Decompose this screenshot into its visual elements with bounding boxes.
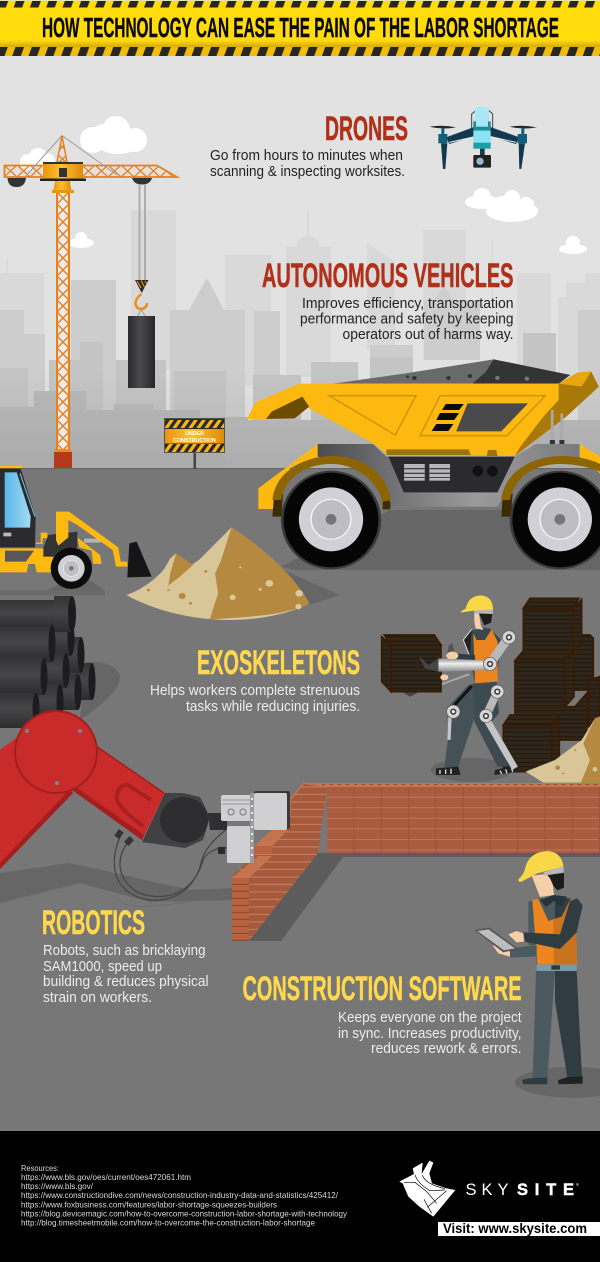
text: robotics: SAM1000, speed up (43, 958, 162, 975)
drone (429, 107, 537, 169)
text: robotics: strain on workers. (43, 989, 152, 1006)
text: autonomous vehicles: performance and safety by keeping (300, 310, 514, 328)
robot lower limb (0, 720, 73, 869)
sand pile (126, 527, 340, 620)
logo: skysite: SITE (517, 1181, 574, 1199)
worker legs (522, 971, 583, 1084)
text: exoskeletons (150, 644, 360, 715)
truck bed (247, 372, 599, 456)
logo: skysite: ® (576, 1182, 579, 1187)
resources list: https://www.foxbusiness.com/features/labor-shortage-squeezes-builders (21, 1199, 277, 1209)
sign: under construction: UNDER (185, 431, 204, 437)
worker belt (537, 964, 577, 971)
text: robotics: Robots, such as bricklaying (43, 942, 206, 959)
crane (4, 136, 177, 468)
text: autonomous vehicles: Improves efficiency, transportation (302, 295, 514, 312)
hook (135, 280, 148, 316)
resources list: https://www.bls.gov/ (21, 1181, 94, 1191)
footer panel (0, 1131, 600, 1262)
resources list (21, 1163, 348, 1228)
crate carried (382, 635, 441, 697)
text: robotics: building & reduces physical (43, 973, 208, 990)
hanging block (128, 316, 155, 388)
tablet and hands (474, 928, 524, 957)
worker torso (440, 627, 501, 685)
text: construction software (242, 970, 522, 1057)
crane jib (4, 136, 177, 177)
robot cables (114, 828, 230, 906)
truck shadow (281, 510, 600, 570)
logo: skysite: SKY (466, 1181, 508, 1199)
robot shadow (0, 863, 232, 903)
text: construction software: in sync. Increases productivity, (338, 1025, 522, 1042)
logo mark (399, 1161, 455, 1217)
worker shadow (515, 1067, 600, 1098)
wall shadow (249, 853, 600, 941)
text: construction software: reduces rework & errors. (371, 1040, 522, 1057)
robot arm (0, 710, 290, 906)
brick wall (232, 783, 600, 941)
truck rear wheel (501, 444, 600, 569)
robot shoulder (14, 710, 98, 794)
worker legs (436, 683, 518, 775)
visit link box: Visit: www.skysite.com (443, 1221, 587, 1236)
text: exoskeletons: tasks while reducing injuries. (186, 698, 360, 715)
text: construction software: Keeps everyone on the project (338, 1009, 522, 1026)
text: autonomous vehicles (262, 257, 514, 343)
exoskeleton frame (418, 631, 516, 768)
sign: under construction: CONSTRUCTION (173, 438, 216, 444)
resources list: Resources: (21, 1163, 59, 1173)
hoist cables (140, 184, 145, 280)
text: drones: scanning & inspecting worksites. (210, 163, 405, 180)
truck front wheel (258, 444, 391, 569)
background sky (0, 56, 600, 469)
stacked crates (503, 598, 600, 772)
worker head (518, 851, 564, 897)
text: autonomous vehicles: operators out of harms way. (342, 326, 514, 343)
resources list: https://www.bls.gov/oes/current/oes472061.htm (21, 1172, 191, 1182)
loader (0, 466, 152, 595)
robot upper limb (72, 744, 165, 840)
truck cargo (333, 359, 570, 384)
wall front (327, 787, 600, 853)
wall return (232, 783, 327, 941)
heading: title banner (0, 0, 600, 56)
ground (0, 468, 600, 1132)
worker shadow (431, 758, 512, 782)
city skyline (0, 210, 600, 469)
worker arms (510, 898, 583, 958)
text: exoskeletons: EXOSKELETONS (197, 644, 360, 682)
resources list: https://www.constructiondive.com/news/construction-industry-data-and-statistics/425412/ (21, 1190, 339, 1200)
wall top (304, 783, 600, 787)
text: exoskeletons: Helps workers complete strenuous (150, 682, 360, 699)
resources list: http://blog.timesheetmobile.com/how-to-overcome-the-construction-labor-shortage (21, 1218, 315, 1228)
truck chassis (318, 444, 580, 507)
worker torso (528, 895, 577, 964)
robot joint (142, 793, 227, 848)
text: drones: DRONES (325, 110, 408, 148)
dump truck (247, 359, 600, 570)
robot head (218, 791, 290, 863)
exoskeleton worker and crates (382, 595, 600, 783)
logo: skysite (399, 1161, 579, 1217)
pipes (0, 596, 120, 728)
text: drones (210, 110, 408, 180)
sand right (526, 717, 600, 783)
resources list: https://blog.devicemagic.com/how-to-overcome-construction-labor-shortage-with-technology (21, 1208, 348, 1218)
text: robotics: ROBOTICS (42, 904, 145, 942)
worker head (460, 595, 493, 630)
clouds (20, 116, 587, 254)
crane cab (8, 162, 152, 193)
sign: under construction (164, 418, 225, 469)
crane tower (54, 192, 72, 468)
text: drones: Go from hours to minutes when (210, 147, 403, 164)
construction software worker (474, 851, 600, 1098)
text: robotics (42, 904, 208, 1006)
